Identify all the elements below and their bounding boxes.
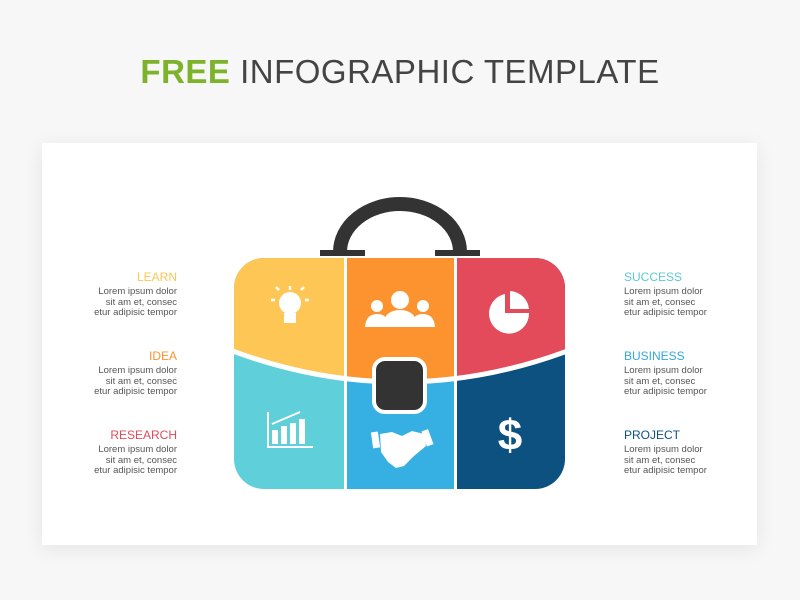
- label: success: sit am et, consec: [624, 296, 695, 308]
- label: project: [624, 428, 707, 476]
- label: success: Lorem ipsum dolor: [624, 286, 703, 297]
- title: FREE INFOGRAPHIC TEMPLATE: [140, 53, 660, 90]
- label: research: Lorem ipsum dolor: [98, 444, 177, 455]
- briefcase: [234, 197, 565, 489]
- label: project: sit am et, consec: [624, 454, 695, 466]
- label: project: Lorem ipsum dolor: [624, 444, 703, 455]
- icon: pie: [489, 291, 529, 334]
- label: learn: sit am et, consec: [106, 296, 177, 308]
- label: idea: [94, 349, 177, 397]
- label: idea: IDEA: [149, 349, 177, 363]
- label: success: [624, 270, 707, 318]
- label: learn: Lorem ipsum dolor: [98, 286, 177, 297]
- label: business: [624, 349, 707, 397]
- label: business: Lorem ipsum dolor: [624, 365, 703, 376]
- label: business: etur adipisic tempor: [624, 386, 707, 397]
- label: idea: sit am et, consec: [106, 376, 177, 386]
- label: learn: [94, 270, 177, 318]
- label: success: SUCCESS: [624, 270, 682, 284]
- label: research: RESEARCH: [110, 428, 177, 442]
- label: idea: Lorem ipsum dolor: [98, 365, 177, 376]
- icon: chart: [267, 412, 313, 448]
- handle: [320, 204, 480, 256]
- label: research: [94, 428, 177, 476]
- label: idea: etur adipisic tempor: [94, 386, 177, 397]
- panels: [234, 258, 565, 489]
- label: research: sit am et, consec: [106, 454, 177, 466]
- label: learn: LEARN: [137, 270, 177, 284]
- clasp: [374, 359, 425, 412]
- label: learn: etur adipisic tempor: [94, 307, 177, 318]
- label: business: sit am et, consec: [624, 376, 695, 386]
- label: business: BUSINESS: [624, 349, 685, 363]
- icon: dollar: $: [498, 411, 522, 460]
- label: research: etur adipisic tempor: [94, 465, 177, 476]
- card background: [42, 143, 757, 545]
- icon: people: [365, 291, 435, 327]
- label: project: PROJECT: [624, 428, 680, 442]
- icon: bulb: [271, 286, 309, 323]
- label: success: etur adipisic tempor: [624, 307, 707, 318]
- icon: handshake: [371, 429, 433, 468]
- label: project: etur adipisic tempor: [624, 465, 707, 476]
